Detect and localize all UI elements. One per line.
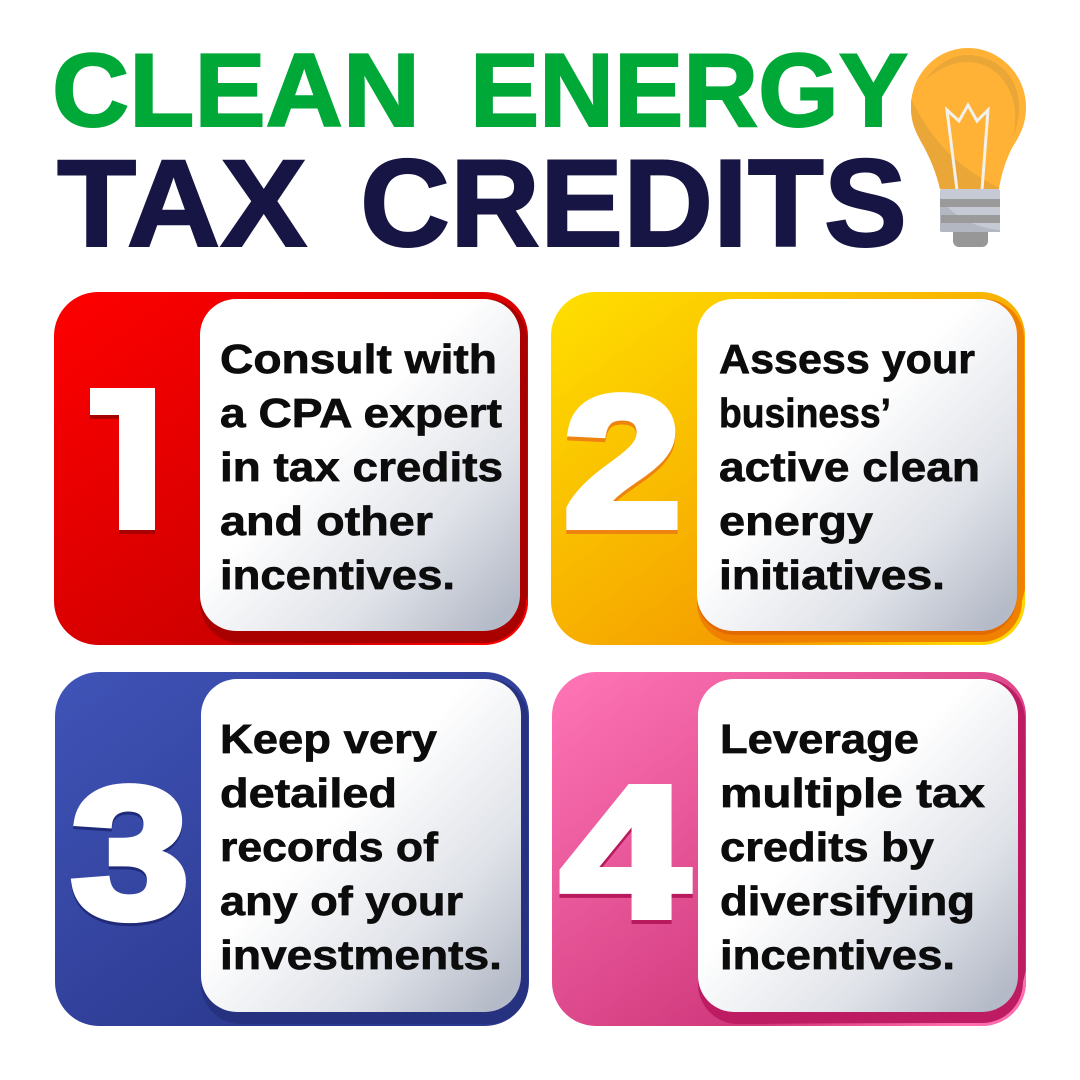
step 3 text: records of	[220, 824, 438, 870]
panel: step 3	[55, 672, 529, 1026]
panel: step 2	[551, 292, 1025, 645]
step 4 text: Leverage	[720, 716, 919, 762]
title line: tax credits: CREDITS	[360, 135, 907, 273]
step 1 text: incentives.	[220, 552, 455, 598]
step 4 text: diversifying	[720, 878, 975, 924]
step number 1: 1	[81, 355, 187, 567]
step 3 text: Keep very	[220, 716, 437, 762]
step 1 text	[220, 336, 503, 598]
title	[52, 33, 908, 273]
title line: tax credits	[57, 135, 907, 273]
icon: light bulb	[900, 48, 1026, 247]
step 3 text: detailed	[220, 770, 397, 816]
step 3 text: investments.	[220, 932, 502, 978]
step number 2: 2	[564, 363, 682, 570]
step 4 text: multiple tax	[720, 770, 985, 816]
title line: clean energy: CLEAN	[52, 33, 420, 149]
step 2 text: Assess your	[719, 336, 975, 382]
step number 2: 2	[564, 359, 682, 566]
step 4 text: credits by	[720, 824, 934, 870]
step 3 text	[220, 716, 502, 978]
step 4 text	[720, 716, 985, 978]
step number 1: 1	[81, 359, 187, 571]
step 2 text: initiatives.	[719, 552, 945, 598]
step 4 text: incentives.	[720, 932, 955, 978]
title line: clean energy: ENERGY	[470, 33, 908, 149]
step 2 text: active clean	[719, 444, 980, 490]
step 3 text: any of your	[220, 878, 463, 924]
step number 1	[90, 388, 155, 534]
step number 4: 4	[561, 749, 689, 956]
step number 3: 3	[71, 750, 189, 957]
step 2 text	[719, 336, 980, 598]
step 1 text: and other	[220, 498, 433, 544]
step number 4: 4	[561, 753, 689, 960]
step 2 text: energy	[719, 498, 873, 544]
panel: step 1	[54, 292, 528, 645]
step number 3: 3	[71, 753, 189, 960]
step 1 text: in tax credits	[220, 444, 503, 490]
panel: step 4	[552, 672, 1026, 1026]
step 1 text: Consult with	[220, 336, 497, 382]
step 2 text: business’	[719, 390, 891, 436]
title line: tax credits: TAX	[57, 135, 307, 273]
step 1 text: a CPA expert	[220, 390, 502, 436]
title line: clean energy	[52, 33, 908, 149]
